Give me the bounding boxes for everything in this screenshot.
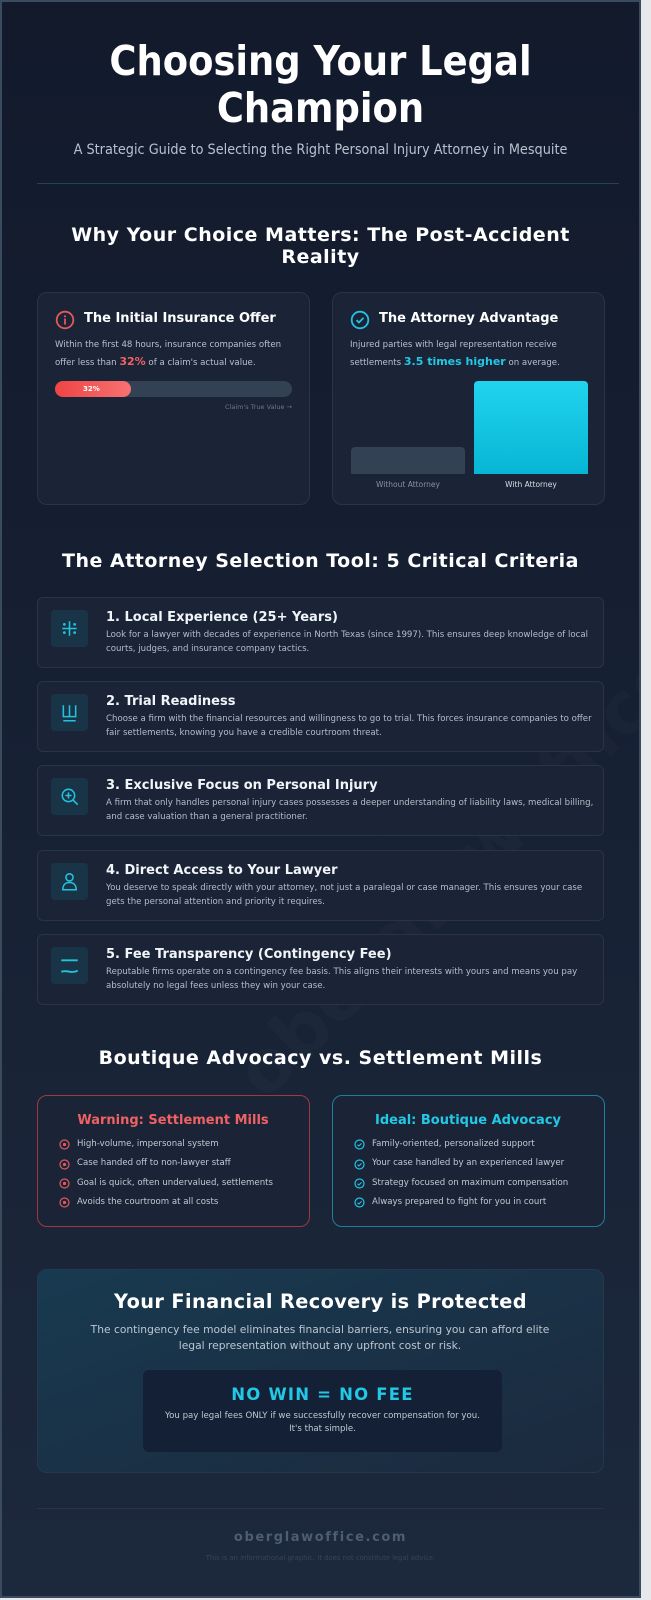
callout: no win no fee [143, 1370, 502, 1452]
title: Champion [217, 84, 424, 132]
heading: boutique vs mills: Boutique Advocacy vs. Settlement Mills [99, 1047, 542, 1069]
criterion 4: You deserve to speak directly with your attorney, not just a paralegal or case manager. This ensures your case gets the personal attention and priority it requires. [106, 883, 582, 906]
heading: selection tool: The Attorney Selection Tool: 5 Critical Criteria [62, 550, 579, 572]
list: warnings: Goal is quick, often undervalued, settlements [77, 1178, 273, 1188]
criterion 4: 4. Direct Access to Your Lawyer [106, 863, 338, 878]
list: benefits: Strategy focused on maximum compensation [372, 1178, 568, 1188]
criterion 1: 1. Local Experience (25+ Years) [106, 610, 338, 625]
criterion 4 [37, 850, 604, 921]
icon: check circle [350, 310, 370, 330]
panel: boutique advocacy [332, 1095, 605, 1227]
criterion 1: Look for a lawyer with decades of experience in North Texas (since 1997). This ensures deep knowledge of local courts, judges, and insurance company tactics. [106, 630, 588, 654]
footer: website: oberglawoffice.com [234, 1530, 407, 1545]
bar chart: With Attorney [505, 480, 557, 489]
bar chart [351, 381, 588, 489]
bar label: Claim's True Value → [225, 403, 292, 411]
criterion 2 [37, 681, 604, 752]
list: warnings [59, 1139, 273, 1208]
list: benefits: Always prepared to fight for you in court [372, 1197, 546, 1207]
criterion 3: A firm that only handles personal injury cases possesses a deeper understanding of liability laws, medical billing, and case valuation than a general practitioner. [106, 798, 593, 822]
criterion 5 [37, 934, 604, 1005]
progress bar: 32% [83, 385, 100, 393]
icon: courthouse [51, 694, 88, 731]
text: Within the first 48 hours, insurance companies often offer less than 32% of a claim's actual value. [55, 340, 281, 368]
list: warnings: High-volume, impersonal system [77, 1139, 219, 1149]
panel: attorney advantage [332, 292, 605, 505]
icon: info [56, 310, 74, 330]
panel: settlement mills [37, 1095, 310, 1227]
card title: The Attorney Advantage [379, 311, 558, 326]
criterion 2: Choose a firm with the financial resources and willingness to go to trial. This forces insurance companies to offer fair settlements, knowing you have a credible courtroom threat. [106, 714, 592, 738]
title: Choosing Your Legal [109, 37, 532, 85]
criterion 1 [37, 597, 604, 668]
panel: financial recovery [37, 1269, 604, 1473]
heading: why your choice matters: Why Your Choice Matters: The Post-Accident [71, 224, 570, 246]
recovery title: Your Financial Recovery is Protected [114, 1290, 527, 1313]
list: benefits: Family-oriented, personalized support [372, 1139, 535, 1149]
criterion 5: 5. Fee Transparency (Contingency Fee) [106, 947, 392, 962]
criterion 3 [37, 765, 604, 836]
list: warnings: Avoids the courtroom at all costs [77, 1197, 218, 1207]
panel: boutique advocacy: Ideal: Boutique Advocacy [375, 1113, 561, 1128]
callout: no win no fee: It's that simple. [289, 1424, 356, 1434]
criterion 2: 2. Trial Readiness [106, 694, 235, 709]
list: warnings: Case handed off to non-lawyer staff [77, 1158, 231, 1168]
progress bar [55, 381, 292, 397]
callout: no win no fee: You pay legal fees ONLY if we successfully recover compensation for you. [165, 1411, 480, 1421]
bar chart: Without Attorney [376, 480, 440, 489]
list: benefits: Your case handled by an experienced lawyer [372, 1158, 564, 1168]
list: benefits [354, 1139, 568, 1208]
icon: crosshair [51, 610, 88, 647]
text: Injured parties with legal representation receive settlements 3.5 times higher on average. [350, 340, 560, 368]
card title: The Initial Insurance Offer [84, 311, 276, 326]
icon: fee [51, 947, 88, 984]
heading: why your choice matters [71, 224, 570, 268]
panel: settlement mills: Warning: Settlement Mills [77, 1113, 269, 1128]
footer: disclaimer: This is an informational graphic. It does not constitute legal advice. [206, 1554, 435, 1562]
callout: no win no fee: NO WIN = NO FEE [231, 1385, 414, 1404]
criterion 5: Reputable firms operate on a contingency fee basis. This aligns their interests with yours and means you pay absolutely no legal fees unless they win your case. [106, 967, 577, 990]
recovery text: The contingency fee model eliminates financial barriers, ensuring you can afford elite legal representation without any upfront cost or risk. [91, 1323, 549, 1352]
icon: person [51, 863, 88, 900]
subtitle: A Strategic Guide to Selecting the Right Personal Injury Attorney in Mesquite [74, 142, 567, 158]
title [109, 37, 532, 132]
icon: magnifier [51, 778, 88, 815]
criterion 3: 3. Exclusive Focus on Personal Injury [106, 778, 378, 793]
panel: initial insurance offer [37, 292, 310, 505]
heading: why your choice matters: Reality [281, 246, 360, 268]
